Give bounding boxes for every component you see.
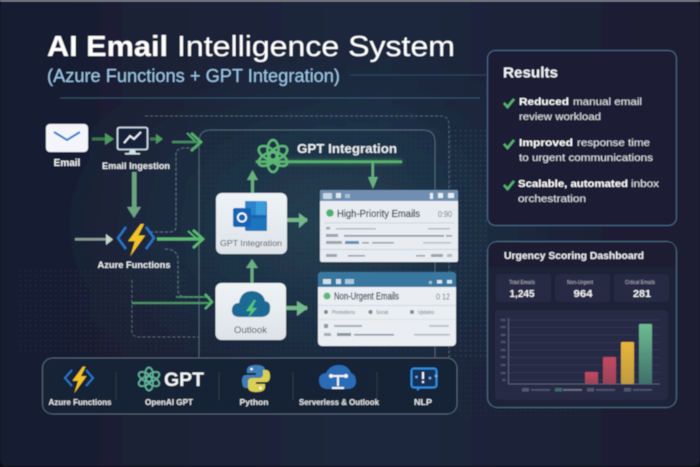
tabs: Promotions (332, 310, 355, 316)
blurred rows (324, 324, 450, 336)
result: improved: Improved (519, 137, 573, 149)
icon: priority dot (326, 209, 334, 217)
icon: openai knot small (137, 367, 161, 391)
axis ticks: 35K (501, 333, 506, 337)
icon: outlook (233, 201, 267, 231)
flow frames and dashed connectors (132, 116, 449, 358)
panel: tech stack (42, 358, 457, 414)
stat: critical emails (614, 274, 669, 302)
arrow: gpt card to high priority (287, 213, 308, 228)
result: scalable (504, 178, 660, 205)
label: azure functions: Azure Functions (98, 260, 170, 271)
icon: cloud with bolt (232, 291, 270, 318)
icon: azure functions small (65, 367, 93, 393)
stat: total emails: 1,245 (510, 288, 535, 300)
result: reduced: Reduced (519, 96, 569, 108)
label: serverless and outlook: Serverless & Outlook (299, 397, 379, 407)
stat: non-urgent (555, 274, 610, 302)
result: scalable: Scalable, automated (518, 178, 628, 190)
icon: serverless cloud (319, 365, 356, 389)
value: non-urgent count: 0 12 (436, 292, 450, 302)
subtitle: (Azure Functions + GPT Integration) (47, 66, 340, 86)
result: scalable: inbox (631, 178, 660, 190)
chart legend (522, 388, 652, 392)
result: scalable: orchestration (518, 193, 586, 205)
result: reduced (504, 96, 642, 123)
panel: results (488, 50, 676, 226)
panel: high-priority emails (320, 190, 458, 262)
axis ticks: 55K (501, 318, 506, 322)
icon: nlp (412, 368, 437, 391)
axis ticks: 30K (501, 348, 506, 352)
stat: non-urgent: 964 (574, 288, 593, 300)
axis ticks: 30K (501, 340, 506, 344)
icon: email ingestion monitor (118, 128, 148, 154)
panel: urgency scoring dashboard (488, 242, 676, 408)
icon: non-urgent dot (324, 292, 330, 300)
icon: python (242, 365, 270, 392)
stat: non-urgent: Non-Urgent (567, 280, 594, 286)
heading: results: Results (503, 64, 558, 82)
title (47, 31, 455, 63)
arrow: ingestion to azure (127, 172, 141, 218)
arrow: into main frame (172, 133, 201, 151)
bar chart (495, 310, 668, 400)
axis ticks: 25K (501, 355, 506, 359)
stat: critical emails: 281 (633, 288, 651, 300)
label: email ingestion: Email Ingestion (102, 161, 170, 172)
heading: high-priority emails: High-Priority Emails (337, 208, 420, 220)
icon: azure functions (118, 224, 154, 256)
axis ticks (501, 318, 506, 382)
stat: total emails: Total Emails (509, 280, 535, 286)
panel: outlook card (216, 283, 286, 340)
axis ticks: 5K (502, 378, 506, 382)
bars (585, 324, 652, 384)
axis ticks: 20K (501, 363, 506, 367)
label: email: Email (54, 158, 81, 169)
arrow: gpt card up (247, 170, 258, 193)
arrow: ingestion onward (150, 134, 163, 144)
heading: non-urgent emails: Non-Urgent Emails (334, 292, 399, 302)
label: azure functions small: Azure Functions (48, 397, 112, 407)
panel: non-urgent emails (318, 272, 456, 346)
result: reduced: manual email (573, 96, 642, 108)
label: openai gpt: OpenAI GPT (145, 397, 194, 407)
panel: gpt integration card (216, 193, 287, 254)
heading: dashboard: Urgency Scoring Dashboard (504, 250, 644, 262)
result: improved: to urgent communications (519, 152, 653, 164)
value: priority count: 0:90 (438, 210, 452, 219)
result: improved (504, 137, 653, 164)
result: reduced: review workload (519, 111, 601, 123)
logo text: gpt: GPT (164, 370, 204, 391)
arrow: azure to gpt (157, 230, 203, 248)
axis ticks: 20K (501, 371, 506, 375)
label: outlook card: Outlook (234, 325, 268, 335)
icon: email envelope (46, 124, 88, 152)
stat: critical emails: Critical Emails (625, 280, 655, 286)
title: AI Email (47, 31, 168, 63)
label: python: Python (240, 397, 268, 407)
blurred message rows (320, 227, 458, 257)
tabs: Updates (418, 310, 434, 316)
label: gpt integration card: GPT Integration (220, 238, 282, 248)
tabs: Social (376, 310, 388, 316)
heading: gpt integration: GPT Integration (297, 141, 397, 156)
arrow: outlook up (246, 259, 258, 283)
tabs (324, 310, 434, 316)
connector: gpt bar glow (256, 160, 402, 164)
title: Intelligence System (177, 31, 455, 63)
icon: openai knot (256, 140, 290, 172)
arrow: gpt to high priority (368, 163, 378, 189)
arrow: input to azure (75, 234, 113, 245)
axis ticks: 50K (501, 325, 506, 329)
arrow: azure to outlook (132, 294, 212, 309)
label: nlp: NLP (414, 397, 432, 407)
arrow: email to ingestion (92, 133, 114, 145)
result: improved: response time (577, 137, 650, 149)
stat: total emails (496, 274, 551, 302)
arrow: outlook to non-urgent (286, 301, 308, 316)
